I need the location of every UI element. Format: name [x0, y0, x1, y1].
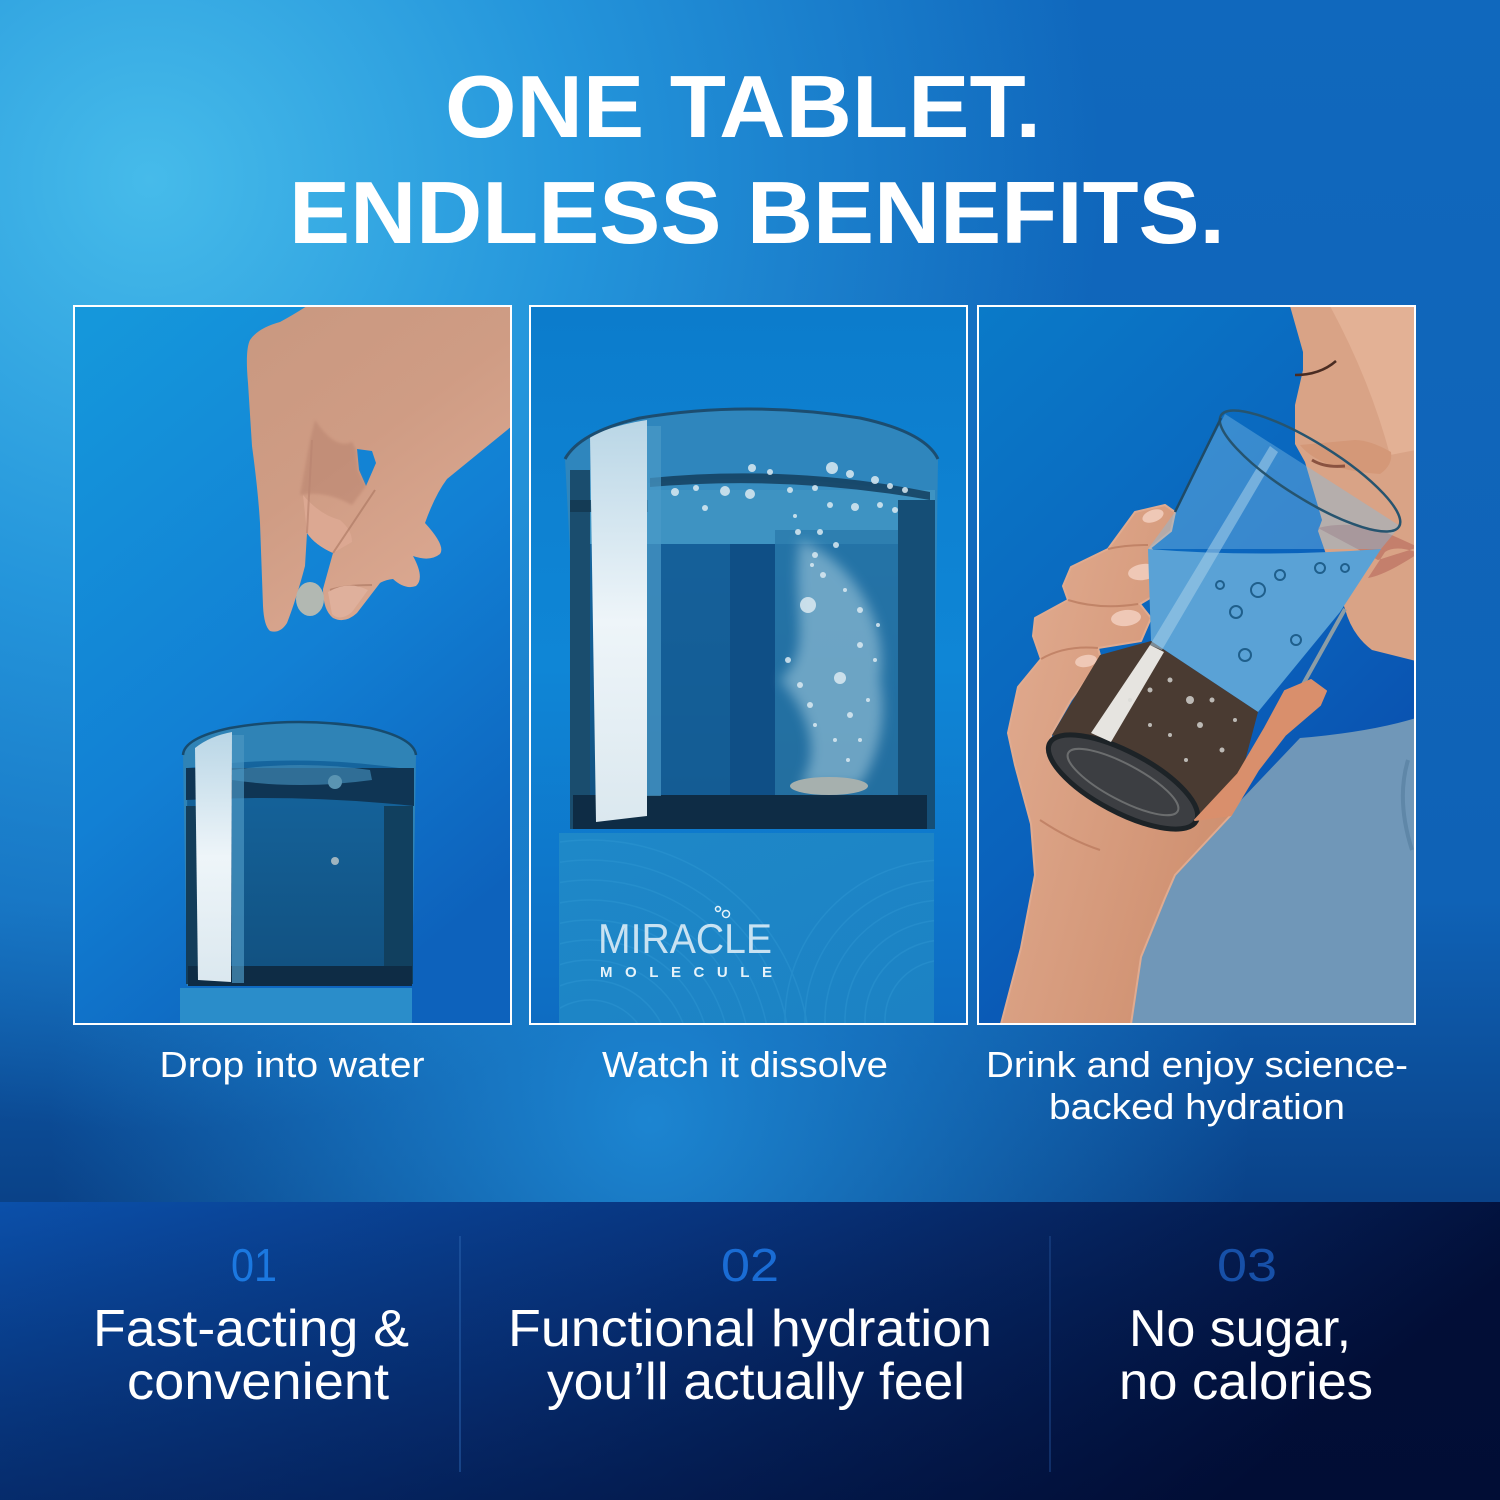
benefit 01: [93, 1239, 409, 1411]
benefit 03: 03: [1217, 1239, 1277, 1291]
eye: [1295, 361, 1336, 375]
glass upper: [1148, 414, 1400, 549]
shirt: [1120, 718, 1416, 1024]
benefit 01: 01: [231, 1239, 277, 1291]
glass highlight: [590, 420, 647, 822]
tablet: [296, 582, 324, 616]
thumb: [1195, 680, 1326, 820]
hand and arm: [1001, 505, 1231, 1024]
benefit 01: convenient: [127, 1353, 390, 1411]
logo: miracle molecule: MOLECULE: [600, 964, 772, 981]
box top: [180, 988, 412, 1024]
bottom band: [0, 1202, 1500, 1500]
finger gap: [357, 449, 376, 486]
panel: drink and enjoy: [978, 306, 1416, 1024]
fingernails: [1074, 507, 1165, 669]
caption 3: backed hydration: [1049, 1086, 1345, 1127]
finger creases: [1040, 545, 1148, 850]
icon: person drinking from glass: [1001, 306, 1416, 1024]
benefit 03: No sugar,: [1129, 1300, 1351, 1358]
lips: [1318, 525, 1416, 578]
logo: miracle molecule: [598, 906, 772, 981]
benefit 01: Fast-acting &: [93, 1300, 409, 1358]
streak: [1150, 446, 1278, 650]
caption 1: Drop into water: [160, 1044, 425, 1085]
caption 2: Watch it dissolve: [602, 1044, 888, 1085]
title: [289, 57, 1225, 262]
icon: glass of water: [183, 722, 416, 986]
box pattern: [703, 901, 934, 1023]
bubble plume: [780, 540, 883, 785]
face: [1290, 306, 1416, 661]
water: [1148, 549, 1381, 712]
benefit 03: [1119, 1239, 1373, 1411]
caption 3: [986, 1044, 1408, 1127]
benefit 02: you’ll actually feel: [547, 1353, 965, 1411]
logo: miracle molecule: MIRACLE: [598, 915, 772, 962]
glass base: [1046, 732, 1200, 832]
panel: drop into water: [74, 306, 512, 1024]
captions: [160, 1044, 1408, 1127]
knuckle shading: [300, 420, 366, 505]
dissolving tablet: [790, 777, 868, 795]
icon: large glass with dissolving tablet: [565, 409, 938, 829]
panel: watch it dissolve: [529, 305, 968, 1025]
thumb nail: [328, 585, 368, 618]
benefit 03: no calories: [1119, 1353, 1373, 1411]
icon: hand holding tablet: [247, 306, 512, 632]
title: ONE TABLET.: [445, 57, 1041, 156]
benefit 02: [508, 1239, 992, 1411]
benefit 02: 02: [721, 1239, 779, 1291]
bubbles: [1216, 563, 1349, 661]
caption 3: Drink and enjoy science-: [986, 1044, 1408, 1085]
sediment bottom: [1052, 641, 1258, 818]
benefit 02: Functional hydration: [508, 1300, 992, 1358]
box with logo: [559, 833, 934, 1023]
glass rim: [1218, 409, 1402, 533]
title: ENDLESS BENEFITS.: [289, 163, 1225, 262]
